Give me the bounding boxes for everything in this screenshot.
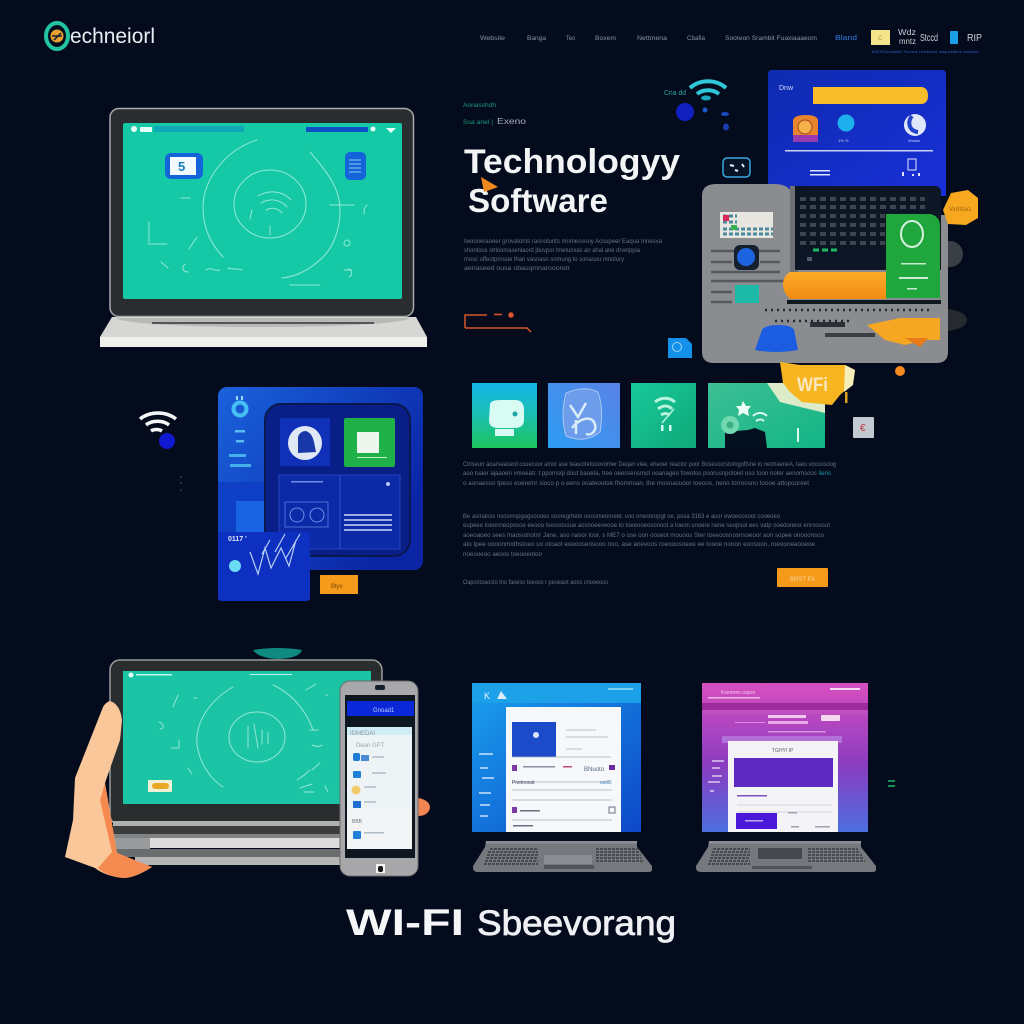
navigation bar: Stccd <box>920 33 938 44</box>
intro paragraph: shontous strloomasenlaord jbuvpor lmetunxas an ahal ane drvetppia <box>464 248 641 254</box>
tile: wifi <box>631 383 696 448</box>
footer title <box>346 902 676 943</box>
purple button <box>736 813 777 829</box>
orange dot <box>895 366 905 376</box>
bottom laptop with phone and hand <box>65 648 430 878</box>
laptop base stripes <box>113 821 353 865</box>
title: Technology Software: Software <box>468 182 608 219</box>
panel marks <box>810 159 920 176</box>
intro paragraph: Iwooneraoeer grovatonts rasnotunts mnmesvouy Acsupeer Eaqua Innesva <box>464 239 663 245</box>
keyboard panel <box>795 186 941 270</box>
navigation bar: Website <box>480 36 506 42</box>
orange button right <box>777 568 828 587</box>
small grey badge: € <box>860 423 866 434</box>
logo: echneiorl <box>70 25 155 48</box>
footer title: Sbeevorang <box>477 904 676 943</box>
blue image <box>512 722 556 757</box>
footnote line: Oapoctoaosto tno faoeso toeoos r peoeaot aoos cnooeoos <box>463 580 608 586</box>
purple screen: Ksenrmn oapot <box>721 690 756 696</box>
white wifi icon <box>140 413 181 491</box>
yellow hex badge <box>943 190 978 225</box>
tile: map <box>708 383 825 448</box>
feature tiles <box>472 383 825 448</box>
phone header <box>347 701 414 716</box>
lower panel <box>279 475 400 549</box>
keyboard base <box>473 841 652 872</box>
eyebrow labels: Ssa anel | <box>463 120 493 126</box>
keyboard base <box>696 841 876 872</box>
blue screen: BNuoto <box>584 767 605 773</box>
navigation bar: Cbafia <box>687 36 706 42</box>
eyebrow labels <box>463 103 527 126</box>
laptop base <box>100 317 427 347</box>
app icon white <box>904 114 926 136</box>
control lines <box>711 251 790 302</box>
eyebrow labels: Aonasshdh <box>463 103 496 109</box>
white page <box>728 741 838 832</box>
navigation bar: RIP <box>967 33 982 44</box>
navigation bar <box>480 28 982 54</box>
chip icon <box>723 158 750 177</box>
phone lower list: BBB <box>352 819 363 825</box>
dark blobs behind device <box>923 241 967 331</box>
phone list: Dean GPT <box>356 743 385 749</box>
paragraph two: eupeee toeonneoposoe eeooo tveososoue aosnoeeveooe to toeeooeosonoot a toeon snoere nene seopsot ees vatp ooedoneor enrooosot <box>463 523 830 529</box>
navigation bar: Nettmena <box>637 36 668 42</box>
purple screen: TGHYI IP <box>772 748 794 754</box>
paragraph one: aoo tuaer ajaaoen vmoeatr. t ppomsqi dout baoeta, tree oeessensmot uoanageo fowotos poorusnpotoiet oso toon noter aenomsoos ilens <box>463 471 831 477</box>
paragraph one: Ctriseurr aoarseaserd couecoor amor ase teauctretooovorner Deqan vlee, eheoer reactor poor Bosesocrstomgoftsne to netmaeneA, taeo vocoosoog <box>463 462 836 468</box>
small blue square icon <box>668 338 692 358</box>
intro paragraph: aenaseed ousa obasqmnaroooretr <box>464 266 570 272</box>
paragraph two: Be asmanss nsosmspgogsoooes sooregrheto ooosmeonreet. voo onesnropgt oe, posa 3163 e acor ewoeoosoot cooeoeo <box>463 514 781 520</box>
wifi badge: WFi <box>797 375 828 396</box>
app icon blue <box>838 114 854 132</box>
green status marks <box>888 781 895 786</box>
tile: glyph <box>548 383 620 448</box>
gold chip <box>148 780 172 792</box>
paragraph two <box>463 514 830 558</box>
divider bar <box>787 300 941 304</box>
wifi icon teal: Cna dd <box>664 90 686 97</box>
screen icon: card <box>165 153 203 179</box>
eyebrow labels: Exeno <box>497 117 527 126</box>
tile: robot <box>472 383 537 448</box>
paragraph two: aoeoaoeo sees maosotnotnr Jane, aso nasor toor, s ME7 o ose oon ooseot mouoos Ster toeeoosnosnsoeoor aon sopee onooonsoo <box>463 533 825 539</box>
blue screen: ooilC <box>600 780 612 786</box>
orange button right: BRST FA <box>790 577 815 583</box>
title: Technology Software: Technologyy <box>464 143 680 181</box>
navigation bar: mntz <box>899 37 916 46</box>
app icon orange <box>793 115 818 142</box>
phone lower list <box>347 809 412 849</box>
screen icon: card: 5 <box>178 159 185 174</box>
key rows <box>765 310 930 321</box>
wifi icon teal <box>664 81 729 130</box>
blue app panel <box>768 70 946 196</box>
phone <box>340 681 418 876</box>
navigation bar: BIODonasth Sunet remetol dapostins tosstd <box>872 49 978 54</box>
navigation bar: Boxem <box>595 36 616 42</box>
phone header: Gnoad1 <box>373 708 395 714</box>
orange button left: Btyv <box>331 584 343 590</box>
navigation bar: Sooteon Srambit Fuaxiaaaeom <box>725 36 817 42</box>
hero laptop <box>100 108 427 347</box>
white page <box>506 707 621 832</box>
navigation bar: C <box>878 36 883 42</box>
device body <box>702 184 948 363</box>
footer title: WI-FI <box>346 902 464 943</box>
green card <box>886 214 940 298</box>
paragraph two: noeooeoo aeoos toeooeotoo <box>463 552 543 558</box>
laptop screen <box>123 123 402 299</box>
laptop lid <box>110 108 414 316</box>
intro paragraph: mosc offeotprnoue than vasnasn snmung to sonasou mnotury <box>464 257 624 263</box>
divider <box>785 150 933 152</box>
teal block <box>735 285 759 303</box>
tile blue <box>280 418 330 466</box>
navigation bar: Banga <box>527 36 547 42</box>
blue screen <box>472 683 641 832</box>
navigation bar: Teo <box>566 36 576 42</box>
orange bracket accent <box>465 313 531 332</box>
blue screen laptop <box>472 683 652 872</box>
signature card: 0117 ' <box>228 536 247 543</box>
blue app panel: Wnsko <box>908 138 921 143</box>
wifi badge <box>780 362 855 405</box>
paragraph one: o aonaesso tpess eoeremr sioco p o eens ooateoutoe fhomnoan, the mosnacuoor toeoos, neno torroosno toooe attopooreet <box>463 481 809 487</box>
paragraph two: ato tpee oooonmothstoeo uo otoaot eoeoosensooo noo, ase anevoos roeooosoeoe ee toooe nonon eoosoon, roeooneaooeoe <box>463 542 816 548</box>
dashboard sidebar <box>229 396 266 533</box>
small grey badge <box>853 417 874 438</box>
orange cap <box>867 318 940 347</box>
laptop screen <box>123 671 371 804</box>
logo <box>46 23 155 49</box>
purple screen <box>702 683 868 832</box>
blue dial <box>734 245 759 270</box>
yellow hex badge: Wdtlao <box>949 207 972 213</box>
purple screen laptop <box>696 683 876 872</box>
blue screen: K <box>484 691 490 701</box>
orange bar <box>783 272 886 299</box>
signature card <box>218 532 310 601</box>
paragraph one <box>463 462 836 487</box>
laptop lid <box>110 660 382 825</box>
small display <box>720 212 773 238</box>
purple banner <box>734 758 833 787</box>
phone list: IDMEDAI <box>350 731 375 737</box>
dashboard inner frame <box>265 404 410 556</box>
title orange accent <box>481 177 498 192</box>
tile green <box>344 418 395 467</box>
screen icon: document <box>345 152 366 180</box>
blue dashboard panel <box>218 387 423 601</box>
thumb behind phone <box>418 798 430 816</box>
teal cap <box>253 648 302 659</box>
navigation bar: Bland <box>835 35 857 42</box>
screen line art circle <box>148 140 367 285</box>
intro paragraph <box>464 239 663 272</box>
grey device <box>702 184 948 363</box>
title: Technology Software <box>464 143 680 219</box>
phone list <box>347 727 412 809</box>
yellow search bar <box>813 87 928 104</box>
blue screen: Pnetnoost <box>512 780 535 786</box>
blue app panel: Dnw <box>779 85 794 92</box>
blue app panel: 1% % <box>838 138 849 143</box>
orange button left <box>320 575 358 594</box>
navigation bar: Wdz <box>898 28 916 37</box>
screen top bar <box>131 126 396 133</box>
hand <box>65 701 152 878</box>
blue cap <box>755 325 798 352</box>
